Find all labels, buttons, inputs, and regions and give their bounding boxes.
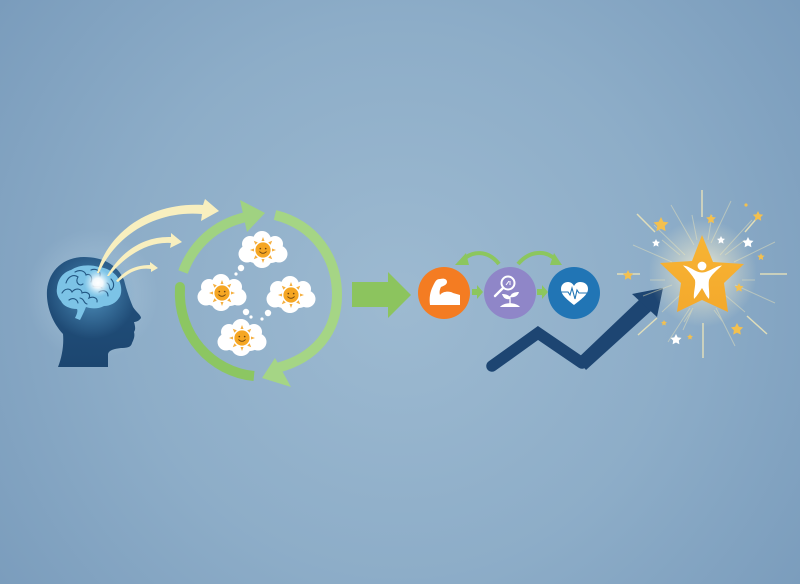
bottom-left arc arrow	[175, 282, 254, 376]
sprout	[500, 292, 520, 307]
person figure	[683, 262, 722, 299]
magnifying glass	[495, 276, 514, 296]
rising trend arrow	[492, 288, 663, 370]
curved arrow to health	[518, 253, 562, 265]
small arrow to health	[537, 285, 548, 299]
thought clouds with smiling suns	[198, 231, 316, 356]
achievement star burst	[617, 190, 787, 358]
right arc arrow	[262, 215, 337, 387]
small stars	[623, 203, 765, 344]
small cream arrow	[116, 262, 158, 282]
icon: head with glowing brain	[26, 229, 158, 367]
large cream arrow	[97, 199, 219, 273]
rays	[617, 190, 787, 358]
head silhouette	[47, 257, 141, 367]
top-left arc arrow	[183, 200, 265, 272]
icon: orange strength circle	[418, 267, 470, 319]
heart with pulse	[561, 282, 588, 305]
icon: purple growth circle	[484, 267, 536, 319]
small arrow to growth	[472, 285, 483, 299]
golden star	[660, 235, 744, 312]
icon: blue heart circle	[548, 267, 600, 319]
thought bubble dots	[234, 265, 271, 321]
large green arrow	[352, 272, 411, 318]
medium cream arrow	[107, 233, 182, 276]
flexed arm	[430, 279, 460, 305]
glowing spark	[84, 269, 112, 297]
cycle of green arrows	[175, 200, 337, 387]
curved feedback arrows	[455, 253, 562, 265]
curved arrow back to strength	[455, 253, 499, 265]
inner glow	[48, 251, 136, 339]
arrows: ideas rising from the brain	[97, 199, 219, 282]
thought cloud bottom	[218, 319, 266, 356]
thought cloud left	[198, 274, 246, 311]
glow	[649, 219, 757, 327]
brain	[57, 265, 121, 320]
thought cloud right	[266, 276, 316, 313]
thought cloud top	[238, 231, 288, 268]
